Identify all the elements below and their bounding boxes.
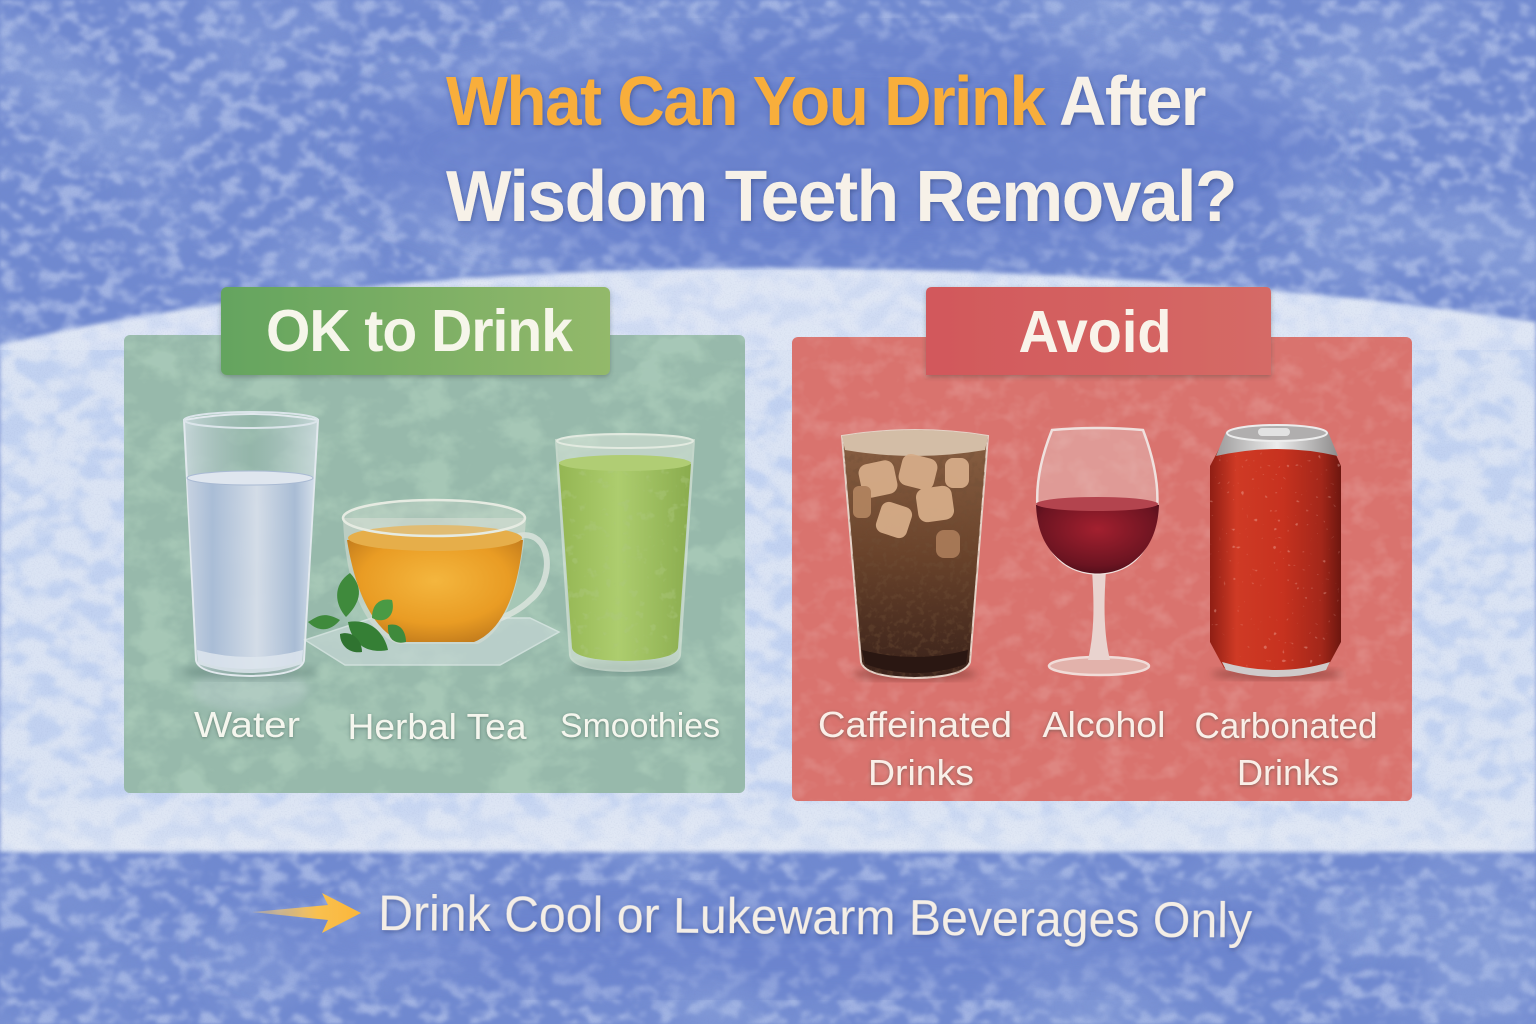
title bbox=[446, 62, 1236, 237]
label: Caffeinated Drinks: Drinks bbox=[868, 752, 974, 793]
label: Smoothies: Smoothies bbox=[560, 707, 720, 745]
label: Carbonated Drinks bbox=[1194, 705, 1378, 793]
title: Wisdom Teeth Removal? bbox=[446, 157, 1236, 237]
background: pale central band bbox=[0, 260, 1536, 860]
heading tab: OK to Drink: OK to Drink bbox=[266, 298, 573, 364]
panel: OK to Drink bbox=[124, 287, 745, 793]
icon: cup of herbal tea with leaves bbox=[305, 500, 559, 665]
title: What Can You Drink After bbox=[446, 62, 1206, 140]
label: Caffeinated Drinks bbox=[818, 704, 1012, 793]
icon: glass of water bbox=[182, 412, 318, 712]
icon: iced coffee glass bbox=[840, 430, 990, 681]
icon: red soda can bbox=[1208, 425, 1344, 680]
panel: Avoid bbox=[792, 287, 1412, 801]
icon: red wine glass bbox=[1036, 428, 1159, 675]
arrow bbox=[252, 893, 361, 933]
label: Carbonated Drinks: Drinks bbox=[1237, 752, 1339, 793]
heading tab: Avoid bbox=[926, 287, 1271, 375]
label: Caffeinated Drinks: Caffeinated bbox=[818, 704, 1012, 745]
icon: green smoothie glass bbox=[556, 434, 696, 675]
footer note: Drink Cool or Lukewarm Beverages Only bbox=[378, 885, 1252, 949]
label: Water: Water bbox=[194, 704, 300, 745]
heading tab: OK to Drink bbox=[221, 287, 610, 375]
icon: mint leaves bbox=[308, 573, 406, 652]
label: Alcohol: Alcohol bbox=[1042, 704, 1166, 745]
label: Herbal Tea: Herbal Tea bbox=[348, 706, 527, 747]
label: Carbonated Drinks: Carbonated bbox=[1194, 705, 1378, 746]
heading tab: Avoid: Avoid bbox=[1018, 299, 1172, 365]
